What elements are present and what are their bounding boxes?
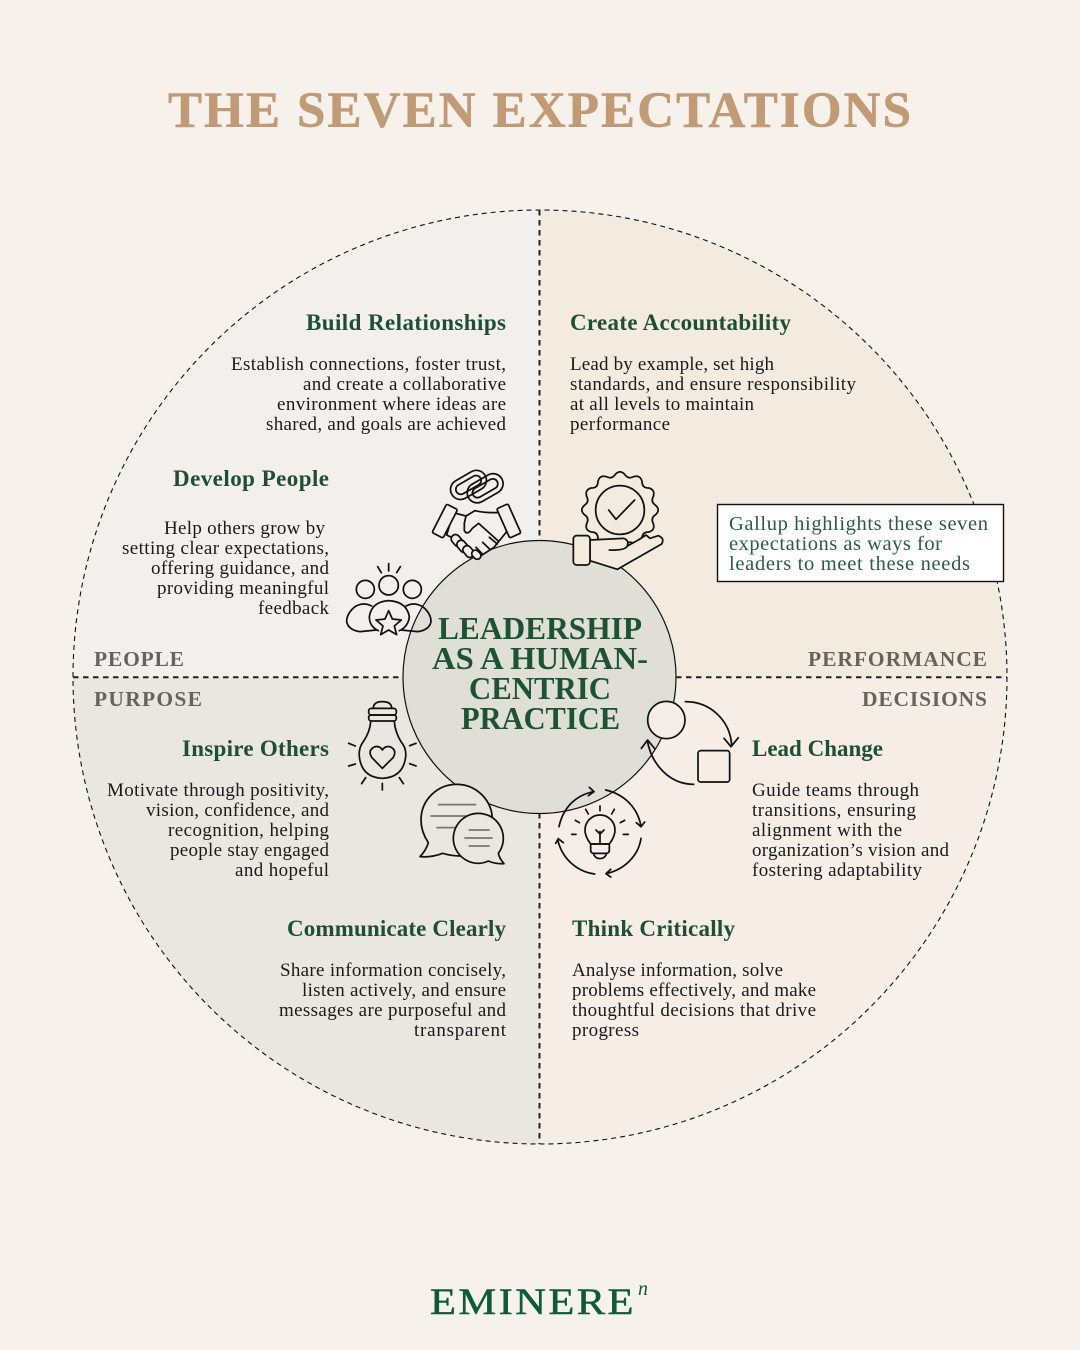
centre circle [403,540,676,814]
block: Build Relationships: Build Relationships [306,310,506,335]
block: Create Accountability: performance [570,414,670,435]
icon: speech bubbles [420,784,504,864]
quadrant label: purpose: PURPOSE [94,687,202,711]
quadrant label: people: PEOPLE [94,647,184,671]
icon: lead change cycle [641,701,738,784]
block: Communicate Clearly [279,916,507,1041]
block: Communicate Clearly: Communicate Clearly [287,916,506,941]
block: Inspire Others: recognition, helping [168,820,330,841]
quadrant: performance [540,210,1007,677]
callout: Gallup note: expectations as ways for [729,533,942,555]
block: Lead Change: alignment with the [752,820,902,841]
quadrant label: decisions: DECISIONS [862,687,987,711]
block: Inspire Others: vision, confidence, and [146,800,330,821]
block: Develop People: setting clear expectations, [122,538,329,559]
block: Build Relationships: environment where ideas are [277,394,506,415]
block: Lead Change: fostering adaptability [752,860,922,881]
callout: Gallup note: Gallup highlights these seven [729,513,988,535]
block: Lead Change: Lead Change [752,736,883,761]
block: Develop People: Develop People [173,466,329,491]
block: Create Accountability: standards, and ensure responsibility [570,374,856,395]
logo: Eminere: n [638,1278,648,1300]
block: Think Critically: Think Critically [572,916,736,941]
icon: critical thinking bulb [556,787,645,877]
block: Develop People: offering guidance, and [151,558,330,579]
centre title [432,610,648,736]
block: Think Critically: problems effectively, and make [572,980,816,1001]
block: Create Accountability: Create Accountability [570,310,792,335]
quadrant: decisions [540,677,1007,1144]
block: Develop People [122,466,330,619]
quadrant: people [73,210,540,677]
quadrant label: performance: PERFORMANCE [808,647,987,671]
block: Inspire Others: and hopeful [235,860,329,881]
block: Create Accountability [570,310,856,435]
block: Develop People: providing meaningful [157,578,329,599]
block: Inspire Others: Motivate through positivity, [107,780,329,801]
block: Inspire Others [107,736,330,881]
block: Think Critically: progress [572,1020,639,1041]
block: Develop People: Help others grow by [164,518,326,539]
block: Communicate Clearly: Share information concisely, [280,960,506,981]
block: Create Accountability: Lead by example, set high [570,354,774,375]
block: Inspire Others: Inspire Others [182,736,329,761]
icon: team with star [347,564,431,635]
block: Think Critically: thoughtful decisions that drive [572,1000,816,1021]
block: Inspire Others: people stay engaged [170,840,330,861]
block: Lead Change: organization’s vision and [752,840,950,861]
block: Lead Change [752,736,950,881]
block: Think Critically: Analyse information, solve [572,960,783,981]
icon: lightbulb with heart [349,702,416,790]
centre title: LEADERSHIP [438,610,642,646]
block: Lead Change: transitions, ensuring [752,800,916,821]
callout: Gallup note [718,504,1004,582]
block: Build Relationships: and create a collaborative [303,374,506,395]
centre title: PRACTICE [461,700,620,736]
centre title: CENTRIC [469,670,611,706]
block: Develop People: feedback [258,598,330,619]
block: Create Accountability: at all levels to maintain [570,394,754,415]
quadrant: purpose [73,677,540,1144]
block: Build Relationships: Establish connections, foster trust, [231,354,506,375]
block: Communicate Clearly: listen actively, and ensure [302,980,506,1001]
block: Build Relationships: shared, and goals are achieved [266,414,506,435]
block: Communicate Clearly: messages are purposeful and [279,1000,506,1021]
logo: Eminere: EMINERE [430,1281,634,1322]
centre title: AS A HUMAN- [432,640,648,676]
block: Lead Change: Guide teams through [752,780,920,801]
block: Communicate Clearly: transparent [414,1020,507,1041]
block: Think Critically [572,916,816,1041]
callout: Gallup note: leaders to meet these needs [729,553,970,575]
block: Build Relationships [231,310,506,435]
icon: handshake with chain [432,467,521,561]
icon: medal in hand [573,472,663,569]
title: THE SEVEN EXPECTATIONS [168,83,911,139]
